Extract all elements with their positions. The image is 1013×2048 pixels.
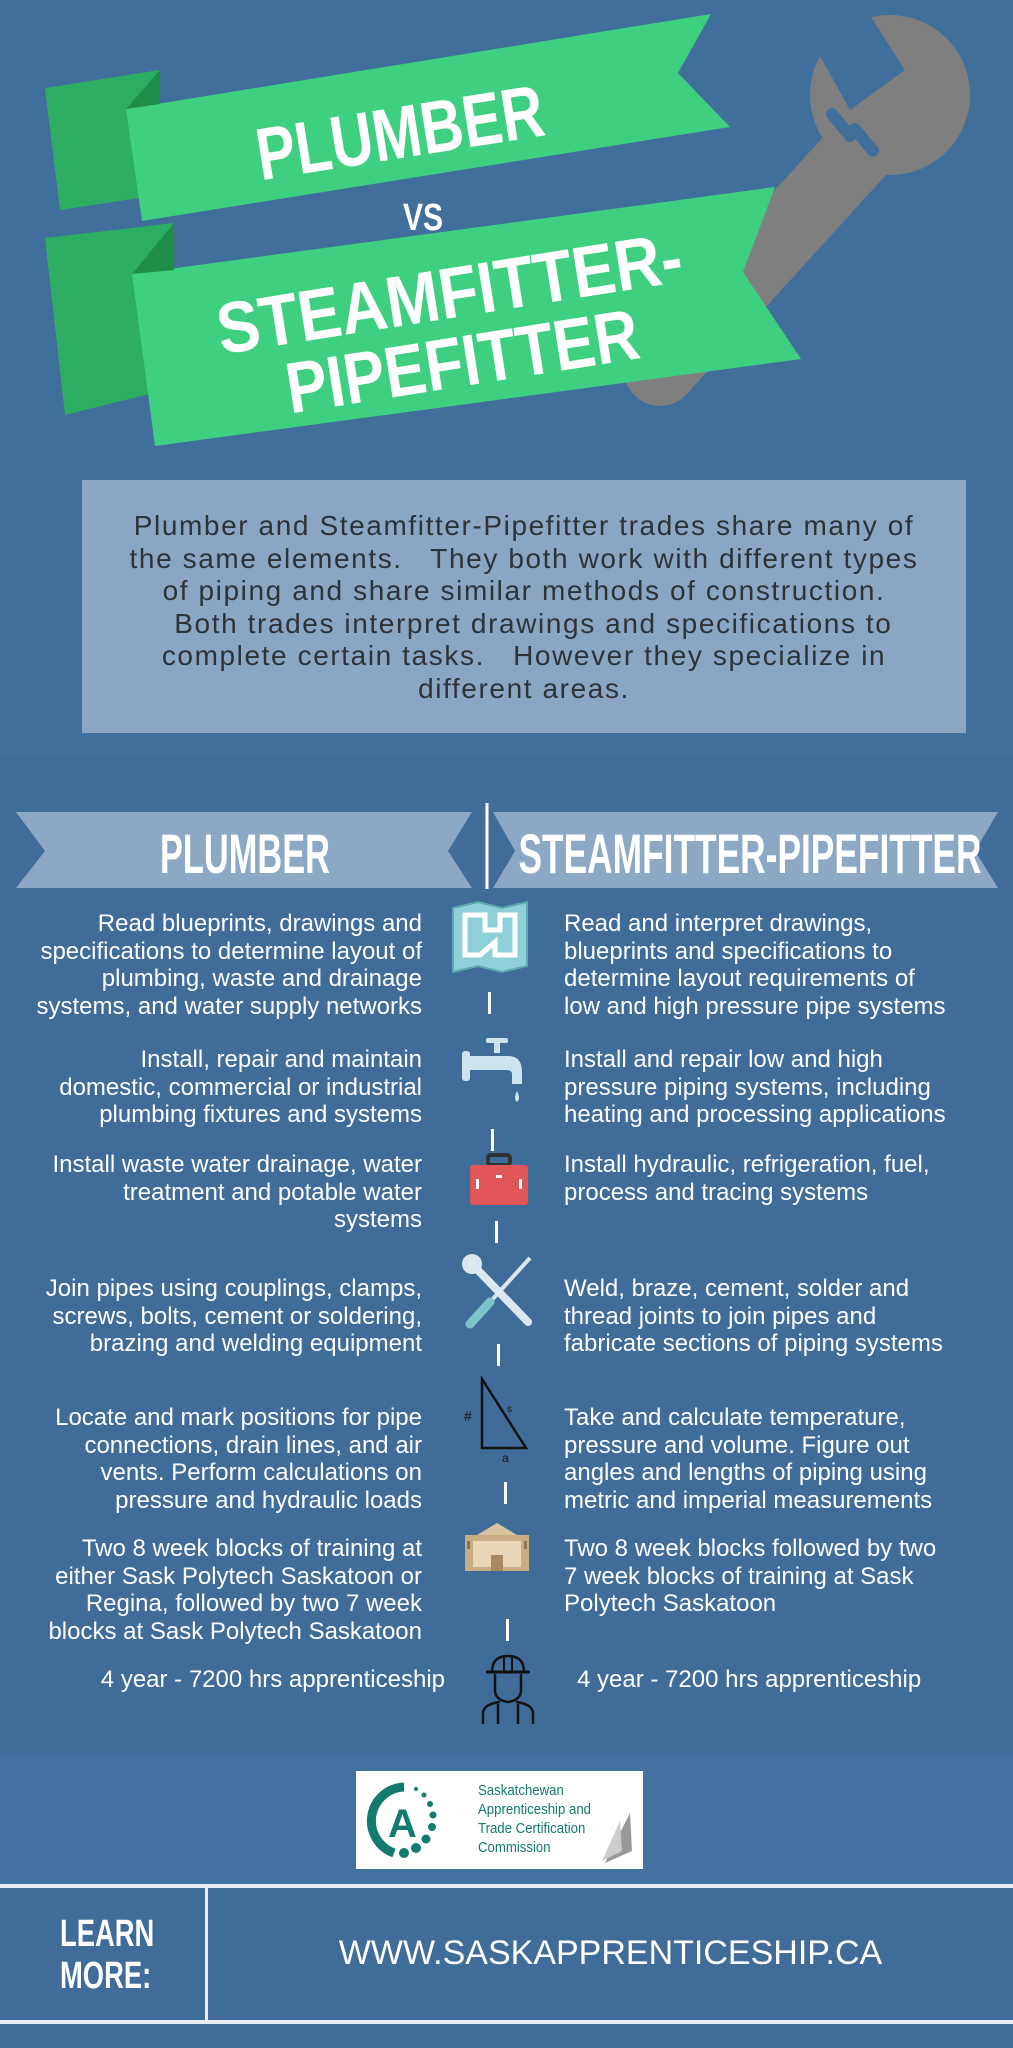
text: steamfitter training bbox=[564, 1535, 936, 1617]
icon: triangle ruler bbox=[464, 1376, 528, 1465]
text: steamfitter calculate bbox=[564, 1404, 932, 1514]
header: plumber bbox=[16, 812, 472, 888]
text: plumber locate bbox=[55, 1404, 422, 1514]
text: plumber training: blocks at Sask Polytech Saskatoon bbox=[48, 1618, 422, 1644]
text: plumber locate: pressure and hydraulic loads bbox=[115, 1486, 422, 1514]
icon: triangle ruler: s bbox=[507, 1404, 512, 1415]
icon: faucet bbox=[462, 1038, 522, 1102]
text: steamfitter calculate: Take and calculate temperature, bbox=[564, 1404, 906, 1431]
vs: VS bbox=[403, 197, 443, 239]
text: plumber locate: vents. Perform calculations on bbox=[101, 1459, 422, 1486]
ribbon: plumber: PLUMBER bbox=[250, 69, 550, 196]
ribbon: steamfitter-pipefitter: PIPEFITTER bbox=[280, 295, 645, 429]
text: plumber blueprints: systems, and water supply networks bbox=[36, 992, 422, 1020]
logo: SATCC: Saskatchewan Apprenticeship and Trade Certification Commission bbox=[478, 1782, 591, 1856]
url: WWW.SASKAPPRENTICESHIP.CA bbox=[339, 1934, 882, 1972]
text: plumber join pipes bbox=[46, 1275, 422, 1357]
text: steamfitter calculate: metric and imperial measurements bbox=[564, 1486, 932, 1514]
text: steamfitter weld bbox=[564, 1275, 943, 1357]
icon: map bbox=[452, 900, 528, 974]
text: plumber join pipes: brazing and welding equipment bbox=[90, 1330, 422, 1357]
text: plumber training: Regina, followed by two 7 week bbox=[86, 1590, 422, 1617]
text: plumber join pipes: Join pipes using couplings, clamps, bbox=[46, 1275, 422, 1302]
comparison headers bbox=[16, 803, 998, 889]
text: plumber apprenticeship: 4 year - 7200 hrs apprenticeship bbox=[101, 1666, 445, 1693]
header: plumber: PLUMBER bbox=[160, 822, 330, 885]
text: steamfitter training: Polytech Saskatoon bbox=[564, 1590, 776, 1617]
logo: SATCC: A bbox=[388, 1802, 417, 1846]
intro text box: the same elements. They both work with different types bbox=[130, 542, 918, 574]
row 4 bbox=[46, 1254, 943, 1366]
text: steamfitter install bbox=[564, 1046, 946, 1128]
row 2 bbox=[59, 1038, 946, 1151]
text: steamfitter apprenticeship: 4 year - 7200 hrs apprenticeship bbox=[577, 1666, 921, 1693]
row 5 bbox=[55, 1376, 932, 1514]
row 3 bbox=[52, 1151, 930, 1243]
logo band background bbox=[0, 1755, 1013, 1886]
intro text box: Plumber and Steamfitter-Pipefitter trades share many of bbox=[134, 510, 914, 541]
intro text box: different areas. bbox=[418, 672, 630, 704]
footer bbox=[0, 1884, 1013, 2024]
icon: wrench bbox=[660, 0, 970, 370]
text: steamfitter calculate: pressure and volume. Figure out bbox=[564, 1432, 910, 1458]
icon: building bbox=[465, 1523, 529, 1571]
learn more label: MORE: bbox=[60, 1955, 151, 1997]
title banner bbox=[45, 14, 970, 446]
icon: wrench and screwdriver bbox=[462, 1254, 532, 1328]
row 6 bbox=[48, 1523, 936, 1644]
ribbon: steamfitter-pipefitter bbox=[45, 187, 801, 446]
text: steamfitter hydraulic bbox=[564, 1151, 930, 1206]
text: plumber training: Two 8 week blocks of training at bbox=[82, 1535, 422, 1562]
text: plumber install fixtures: plumbing fixtures and systems bbox=[99, 1101, 422, 1128]
text: plumber install fixtures bbox=[59, 1046, 422, 1128]
text: plumber blueprints: Read blueprints, drawings and bbox=[98, 910, 422, 937]
text: steamfitter install: heating and processing applications bbox=[564, 1101, 946, 1128]
text: plumber install fixtures: Install, repair and maintain bbox=[141, 1046, 422, 1073]
text: plumber waste water: systems bbox=[334, 1206, 422, 1233]
icon: triangle ruler: a bbox=[502, 1451, 509, 1465]
learn more label: LEARN bbox=[60, 1913, 154, 1955]
text: plumber locate: Locate and mark positions for pipe bbox=[55, 1404, 422, 1431]
text: plumber blueprints: plumbing, waste and drainage bbox=[102, 965, 422, 992]
icon: toolbox bbox=[470, 1153, 528, 1205]
text: steamfitter training: Two 8 week blocks followed by two bbox=[564, 1535, 936, 1562]
text: steamfitter weld: Weld, braze, cement, solder and bbox=[564, 1275, 909, 1302]
text: plumber waste water bbox=[52, 1151, 422, 1233]
text: steamfitter weld: thread joints to join pipes and bbox=[564, 1302, 876, 1330]
text: steamfitter drawings: Read and interpret drawings, bbox=[564, 910, 872, 937]
text: plumber waste water: treatment and potable water bbox=[123, 1178, 422, 1206]
text: steamfitter drawings: low and high pressure pipe systems bbox=[564, 992, 946, 1020]
text: steamfitter hydraulic: process and tracing systems bbox=[564, 1178, 868, 1206]
ribbon: steamfitter-pipefitter: STEAMFITTER- bbox=[211, 218, 688, 370]
text: steamfitter drawings: determine layout requirements of bbox=[564, 965, 915, 992]
row 1 bbox=[36, 900, 946, 1020]
learn more label bbox=[60, 1913, 154, 1997]
intro text box: of piping and share similar methods of construction. bbox=[163, 575, 885, 606]
text: steamfitter training: 7 week blocks of training at Sask bbox=[564, 1562, 914, 1590]
text: plumber locate: connections, drain lines, and air bbox=[84, 1432, 422, 1458]
text: steamfitter drawings: blueprints and specifications to bbox=[564, 938, 892, 964]
text: plumber join pipes: screws, bolts, cement or soldering, bbox=[53, 1302, 422, 1330]
text: steamfitter calculate: angles and lengths of piping using bbox=[564, 1459, 927, 1486]
text: steamfitter weld: fabricate sections of piping systems bbox=[564, 1330, 943, 1357]
text: plumber blueprints: specifications to determine layout of bbox=[40, 938, 422, 964]
row 7 bbox=[101, 1654, 921, 1724]
text: plumber waste water: Install waste water drainage, water bbox=[52, 1151, 422, 1178]
text: steamfitter install: pressure piping systems, including bbox=[564, 1074, 931, 1100]
intro text box bbox=[82, 480, 966, 733]
ribbon: plumber bbox=[45, 14, 730, 221]
icon: worker bbox=[482, 1654, 534, 1724]
text: plumber blueprints bbox=[36, 910, 422, 1020]
logo: SATCC bbox=[356, 1771, 643, 1869]
intro text box: Both trades interpret drawings and specifications to bbox=[174, 608, 892, 638]
text: steamfitter drawings bbox=[564, 910, 946, 1020]
top section background bbox=[0, 0, 1013, 757]
icon: triangle ruler: # bbox=[464, 1408, 472, 1424]
text: plumber training: either Sask Polytech Saskatoon or bbox=[55, 1562, 422, 1590]
text: steamfitter hydraulic: Install hydraulic, refrigeration, fuel, bbox=[564, 1151, 930, 1178]
text: plumber training bbox=[48, 1535, 422, 1644]
text: steamfitter install: Install and repair low and high bbox=[564, 1046, 883, 1073]
intro text box: complete certain tasks. However they specialize in bbox=[162, 640, 886, 671]
text: plumber install fixtures: domestic, commercial or industrial bbox=[59, 1074, 422, 1100]
